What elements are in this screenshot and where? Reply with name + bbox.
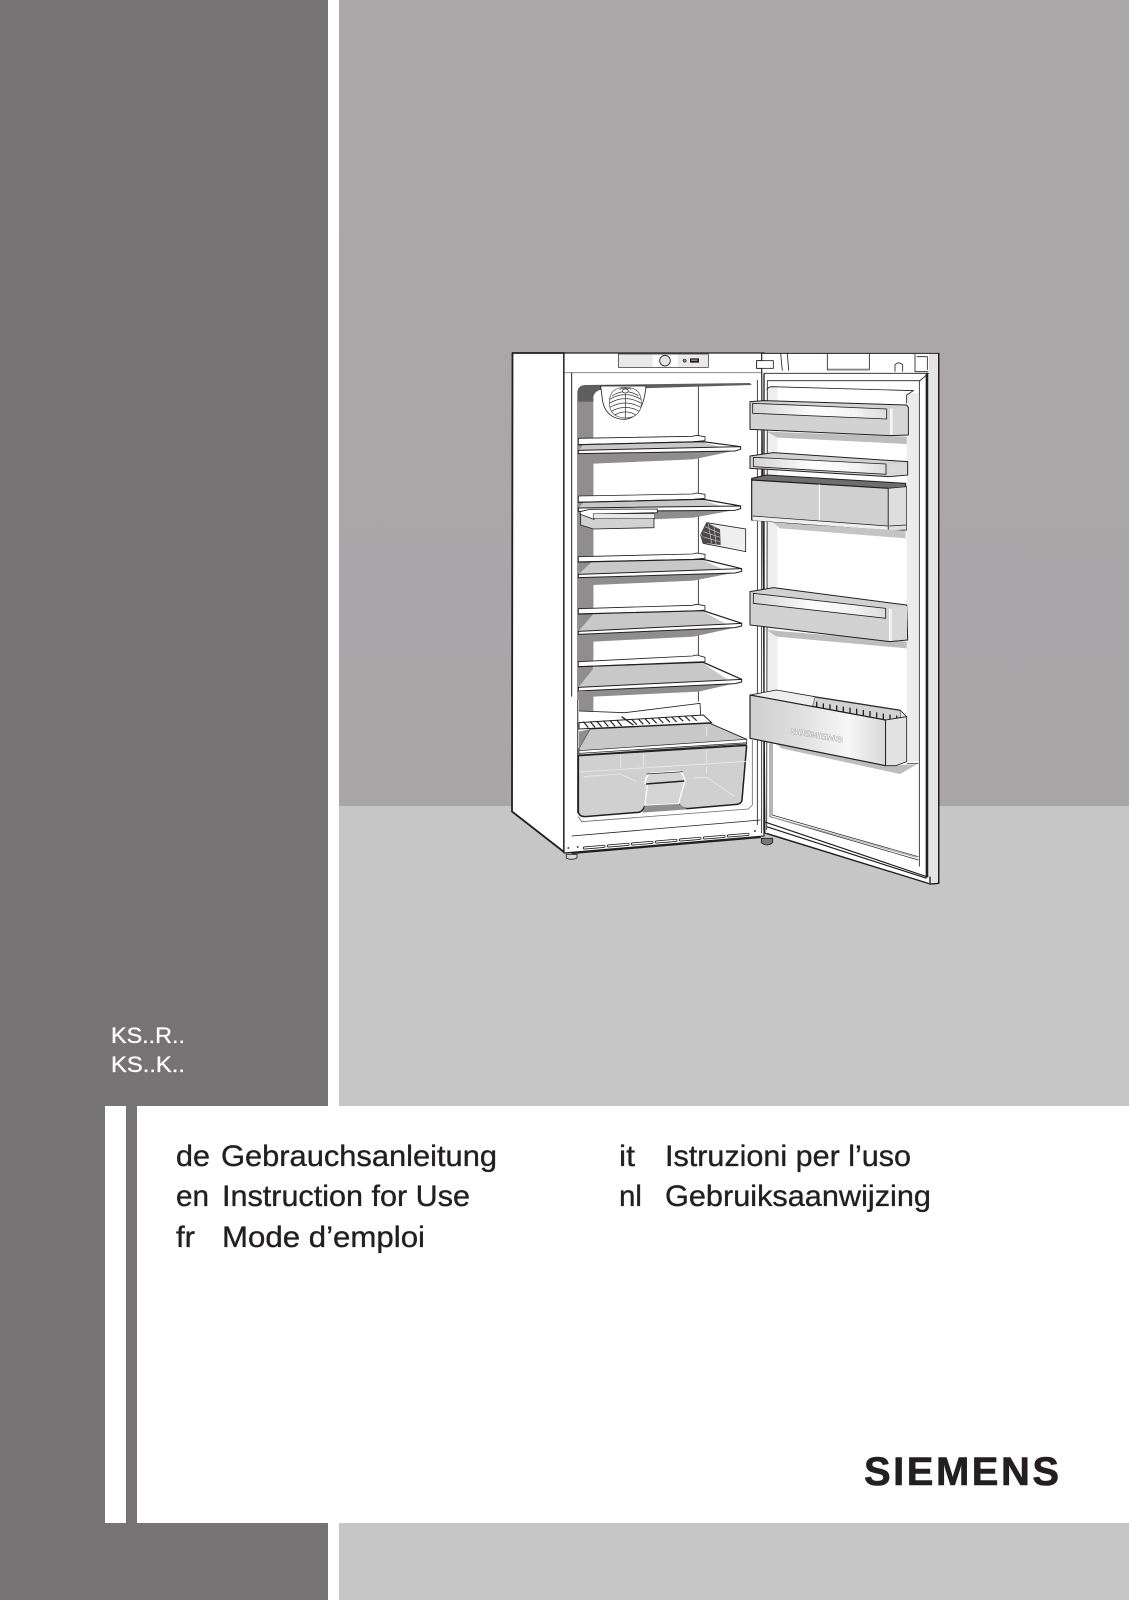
panel: dark grey left column: [0, 0, 328, 1600]
shelf 5: [578, 655, 742, 700]
panel: floor background: [339, 806, 1129, 1106]
crisper drawer: [578, 745, 747, 817]
back wall step: [579, 703, 701, 716]
decorative white stripe: [105, 1106, 126, 1523]
door box with two compartments: [752, 475, 907, 538]
lower compartment with crisper drawer: [566, 691, 773, 859]
en code: en: [176, 1180, 209, 1213]
en title: Instruction for Use: [222, 1180, 470, 1213]
plinth with vent slots: [567, 820, 761, 853]
front foot: [566, 854, 577, 859]
interior outline: [578, 740, 752, 822]
fr code: fr: [176, 1221, 195, 1254]
door bin 3: [750, 588, 908, 648]
door gasket lines: [764, 743, 928, 883]
left inner wall shade: [579, 388, 593, 702]
bin brand text: SIEMENS: [790, 725, 845, 745]
interior left edge and ceiling: [577, 383, 752, 700]
decorative grey stripe: [126, 1106, 137, 1523]
model numbers: [111, 1023, 185, 1077]
large door bin: [750, 690, 907, 766]
air vent: [701, 523, 746, 552]
rear foot: [761, 838, 773, 845]
language list, left column: [176, 1140, 497, 1254]
nl title: Gebruiksaanwijzing: [665, 1180, 931, 1213]
panel: white title band: [137, 1106, 1130, 1523]
model line 2: KS..K..: [111, 1052, 185, 1077]
grille: [579, 715, 712, 729]
door bottom section and large bin: [750, 690, 928, 883]
cabinet side panel: [512, 353, 564, 852]
small drawer under shelf 2: [580, 509, 657, 529]
fan cover: [601, 386, 646, 419]
logo: SIEMENS: SIEMENS: [864, 1450, 1059, 1494]
panel: floor strip at bottom: [339, 1523, 1129, 1600]
door bin 2: [750, 453, 908, 477]
shelf 4: [578, 604, 742, 658]
glass shelf above drawer: [579, 723, 747, 755]
shelf 2: [578, 493, 741, 556]
nl code: nl: [619, 1180, 642, 1213]
door inner liner: [767, 373, 928, 877]
shelf 1: [578, 435, 741, 496]
cabinet interior and contents, upper half: [565, 354, 773, 702]
door top details: [757, 353, 928, 372]
control panel: [618, 354, 708, 367]
drawer handle: [645, 771, 685, 805]
it title: Istruzioni per l’uso: [665, 1140, 911, 1173]
language list, right column: [619, 1140, 931, 1213]
cabinet front frame: [564, 353, 764, 853]
door bin 1: [750, 401, 908, 444]
de code: de: [176, 1140, 210, 1173]
bin shadow: [773, 742, 918, 774]
shelf 3: [578, 553, 742, 607]
de title: Gebrauchsanleitung: [221, 1140, 497, 1173]
bin right liner end: [907, 762, 918, 764]
door: [750, 353, 939, 884]
door latch: [757, 361, 773, 368]
it code: it: [619, 1140, 636, 1173]
fr title: Mode d’emploi: [222, 1221, 425, 1254]
illustration: open refrigerator: [512, 353, 939, 884]
panel: wall background: [339, 0, 1129, 806]
model line 1: KS..R..: [111, 1023, 185, 1048]
door body: [762, 353, 939, 884]
